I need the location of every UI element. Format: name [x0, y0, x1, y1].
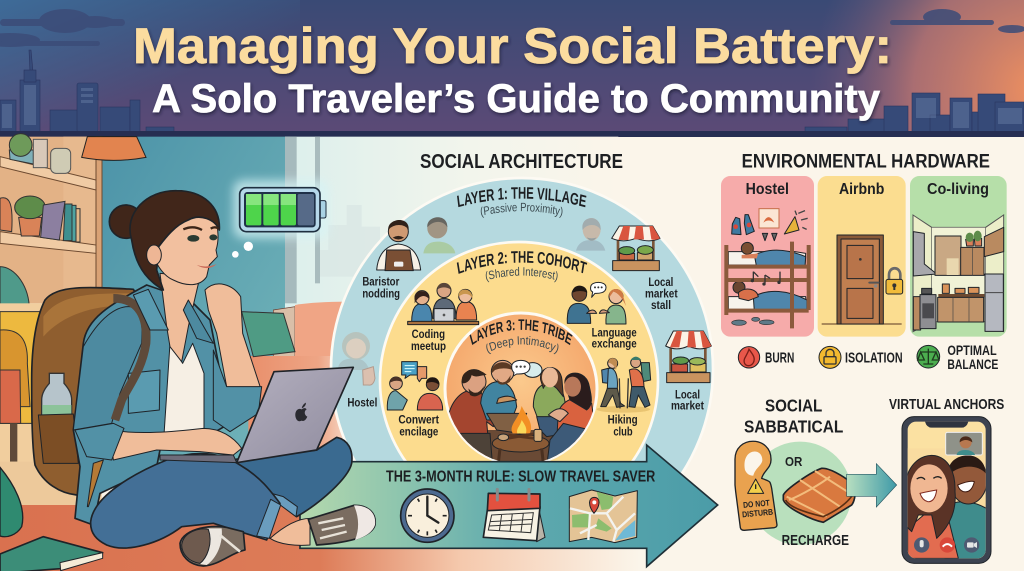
call buttons	[914, 537, 979, 553]
text: hiking club label: Hiking	[608, 412, 638, 426]
text: barista label: nodding	[362, 286, 400, 300]
panel: environmental hardware	[721, 150, 1007, 372]
card: hostel: Hostel	[746, 181, 789, 198]
water bottle	[42, 373, 72, 416]
icon: folded map	[569, 490, 637, 543]
laptop	[160, 367, 353, 463]
label: optimal balance: OPTIMAL	[947, 342, 997, 358]
text: local market label: market	[671, 399, 704, 413]
layer 2 circle	[380, 242, 658, 520]
card: co-living: Co-living	[927, 181, 989, 198]
party icons	[732, 209, 808, 241]
arrow: 3-month rule banner	[300, 445, 718, 567]
icon: tribe campfire scene	[449, 360, 594, 461]
title: Managing Your Social Battery:	[133, 18, 892, 74]
text: hostel label: Hostel	[347, 395, 377, 409]
layer 3 curved label: LAYER 3: THE TRIBE	[470, 319, 572, 346]
text: convert enclave label	[398, 412, 439, 438]
text: language exchange label	[592, 325, 637, 351]
text: coding meetup label	[411, 327, 446, 353]
icon: door hanger: DO NOT	[743, 498, 770, 510]
battery thought	[232, 180, 328, 258]
panel: social architecture circles	[330, 177, 714, 474]
inset video	[946, 432, 982, 455]
icon: hostel person waving	[338, 332, 375, 385]
text: local market stall label: Local	[648, 275, 673, 289]
green recharge circle	[748, 442, 852, 545]
label: isolation	[819, 346, 903, 368]
icon: market stall top	[612, 226, 660, 271]
woman with laptop illustration	[0, 180, 375, 571]
text: local market stall label	[645, 275, 678, 312]
panel: social sabbatical and virtual anchors	[735, 396, 1004, 563]
backpack	[32, 288, 150, 495]
pendant lamp	[82, 137, 146, 160]
text: or: OR	[785, 454, 803, 469]
friend man blue tee	[481, 360, 527, 433]
layer 3 circle	[445, 313, 597, 465]
layer 3 curved label: (Deep Intimacy)	[486, 336, 558, 354]
icon: nodding person	[423, 217, 455, 253]
arrow: to virtual anchors	[847, 464, 897, 507]
clouds	[0, 9, 1024, 47]
head	[109, 191, 219, 290]
text: hiking club label	[608, 412, 638, 438]
green pillow	[0, 467, 23, 537]
icon: phone video call	[902, 417, 992, 563]
icon: market stall right	[666, 331, 711, 383]
faint city behind window	[320, 205, 380, 277]
title	[133, 18, 892, 121]
heading: virtual anchors: VIRTUAL ANCHORS	[889, 397, 1004, 413]
table and fire	[492, 406, 549, 463]
thought dots	[232, 242, 253, 258]
text: convert enclave label: Conwert	[398, 412, 439, 426]
heading: ENVIRONMENTAL HARDWARE	[742, 150, 990, 172]
text: recharge: RECHARGE	[782, 533, 849, 549]
city skyline	[0, 50, 1024, 132]
label: isolation: ISOLATION	[845, 351, 903, 367]
layer 1 curved label: (Passive Proximity)	[480, 202, 562, 218]
text: local market stall label: market	[645, 287, 678, 301]
bunk bed	[726, 242, 809, 328]
label: burn	[738, 347, 794, 368]
text: local market stall label: stall	[651, 298, 671, 312]
neck	[160, 273, 200, 362]
layer 2 curved label: LAYER 2: THE COHORT	[456, 251, 588, 274]
icon: clock	[401, 489, 454, 542]
card: co-living	[910, 176, 1007, 337]
raised arm and hand	[205, 284, 262, 432]
left room scene background	[0, 134, 618, 510]
card: hostel	[721, 176, 814, 337]
left forearm on keyboard	[75, 423, 242, 460]
label: burn: BURN	[765, 351, 794, 367]
icon: door hanger: DISTURB	[742, 507, 773, 519]
text: language exchange label: Language	[592, 325, 637, 339]
padlock	[886, 268, 903, 294]
friend woman orange sweater	[547, 372, 594, 460]
layer 2 curved label: (Shared Interest)	[486, 266, 558, 282]
friend left	[449, 369, 494, 459]
panel: social architecture heading: SOCIAL ARCHITECTURE	[420, 151, 623, 173]
text: local market label	[671, 387, 704, 413]
icon: conversation pair	[387, 362, 443, 410]
sofa and cushion	[242, 302, 348, 466]
rug floor band	[0, 505, 640, 571]
icon: older man	[576, 218, 605, 251]
speech bubbles	[512, 360, 542, 377]
card: airbnb	[818, 176, 906, 337]
title: A Solo Traveler’s Guide to Community	[152, 77, 881, 121]
door	[822, 235, 902, 324]
backpack strap	[113, 298, 146, 420]
icon: hiking pair	[597, 357, 651, 413]
text: hiking club label: club	[613, 424, 633, 438]
header banner	[0, 0, 1024, 137]
icon: barista	[377, 220, 421, 271]
icon: folded blanket	[783, 468, 855, 522]
white tee	[164, 343, 204, 435]
text: coding meetup label: Coding	[412, 327, 445, 341]
heading: social sabbatical: SOCIAL	[765, 396, 822, 416]
text: barista label: Baristor	[362, 275, 399, 289]
text: language exchange label: exchange	[592, 337, 637, 351]
jacket	[73, 285, 230, 525]
text: convert enclave label: encilage	[399, 424, 438, 438]
heading: social sabbatical: SABBATICAL	[744, 416, 843, 436]
label: optimal balance	[917, 342, 998, 372]
label: optimal balance: BALANCE	[947, 356, 998, 372]
text: 3-month rule: THE 3-MONTH RULE: SLOW TRAVEL SAVER	[386, 469, 655, 486]
collar	[133, 289, 213, 343]
heading: social sabbatical	[744, 396, 843, 436]
text: barista label	[362, 275, 400, 300]
yellow armchair	[0, 303, 102, 510]
sneakers	[180, 505, 375, 566]
icon: door hanger	[735, 441, 777, 530]
notebook	[0, 537, 103, 571]
man on call	[944, 456, 986, 558]
kitchen	[913, 215, 1004, 332]
layer 1 circle	[330, 177, 714, 474]
icon: battery	[240, 188, 326, 232]
jeans legs	[91, 437, 352, 548]
card: airbnb: Airbnb	[839, 181, 884, 198]
text: coding meetup label: meetup	[411, 339, 446, 353]
bookshelf	[0, 134, 102, 312]
icon: language exchange pair	[567, 282, 626, 324]
friend woman green top	[533, 367, 567, 437]
text: local market label: Local	[675, 387, 700, 401]
icon: coding meetup group	[408, 283, 479, 325]
icon: calendar	[483, 489, 545, 542]
woman on call	[905, 455, 958, 558]
layer 1 curved label: LAYER 1: THE VILLAGE	[457, 187, 586, 208]
